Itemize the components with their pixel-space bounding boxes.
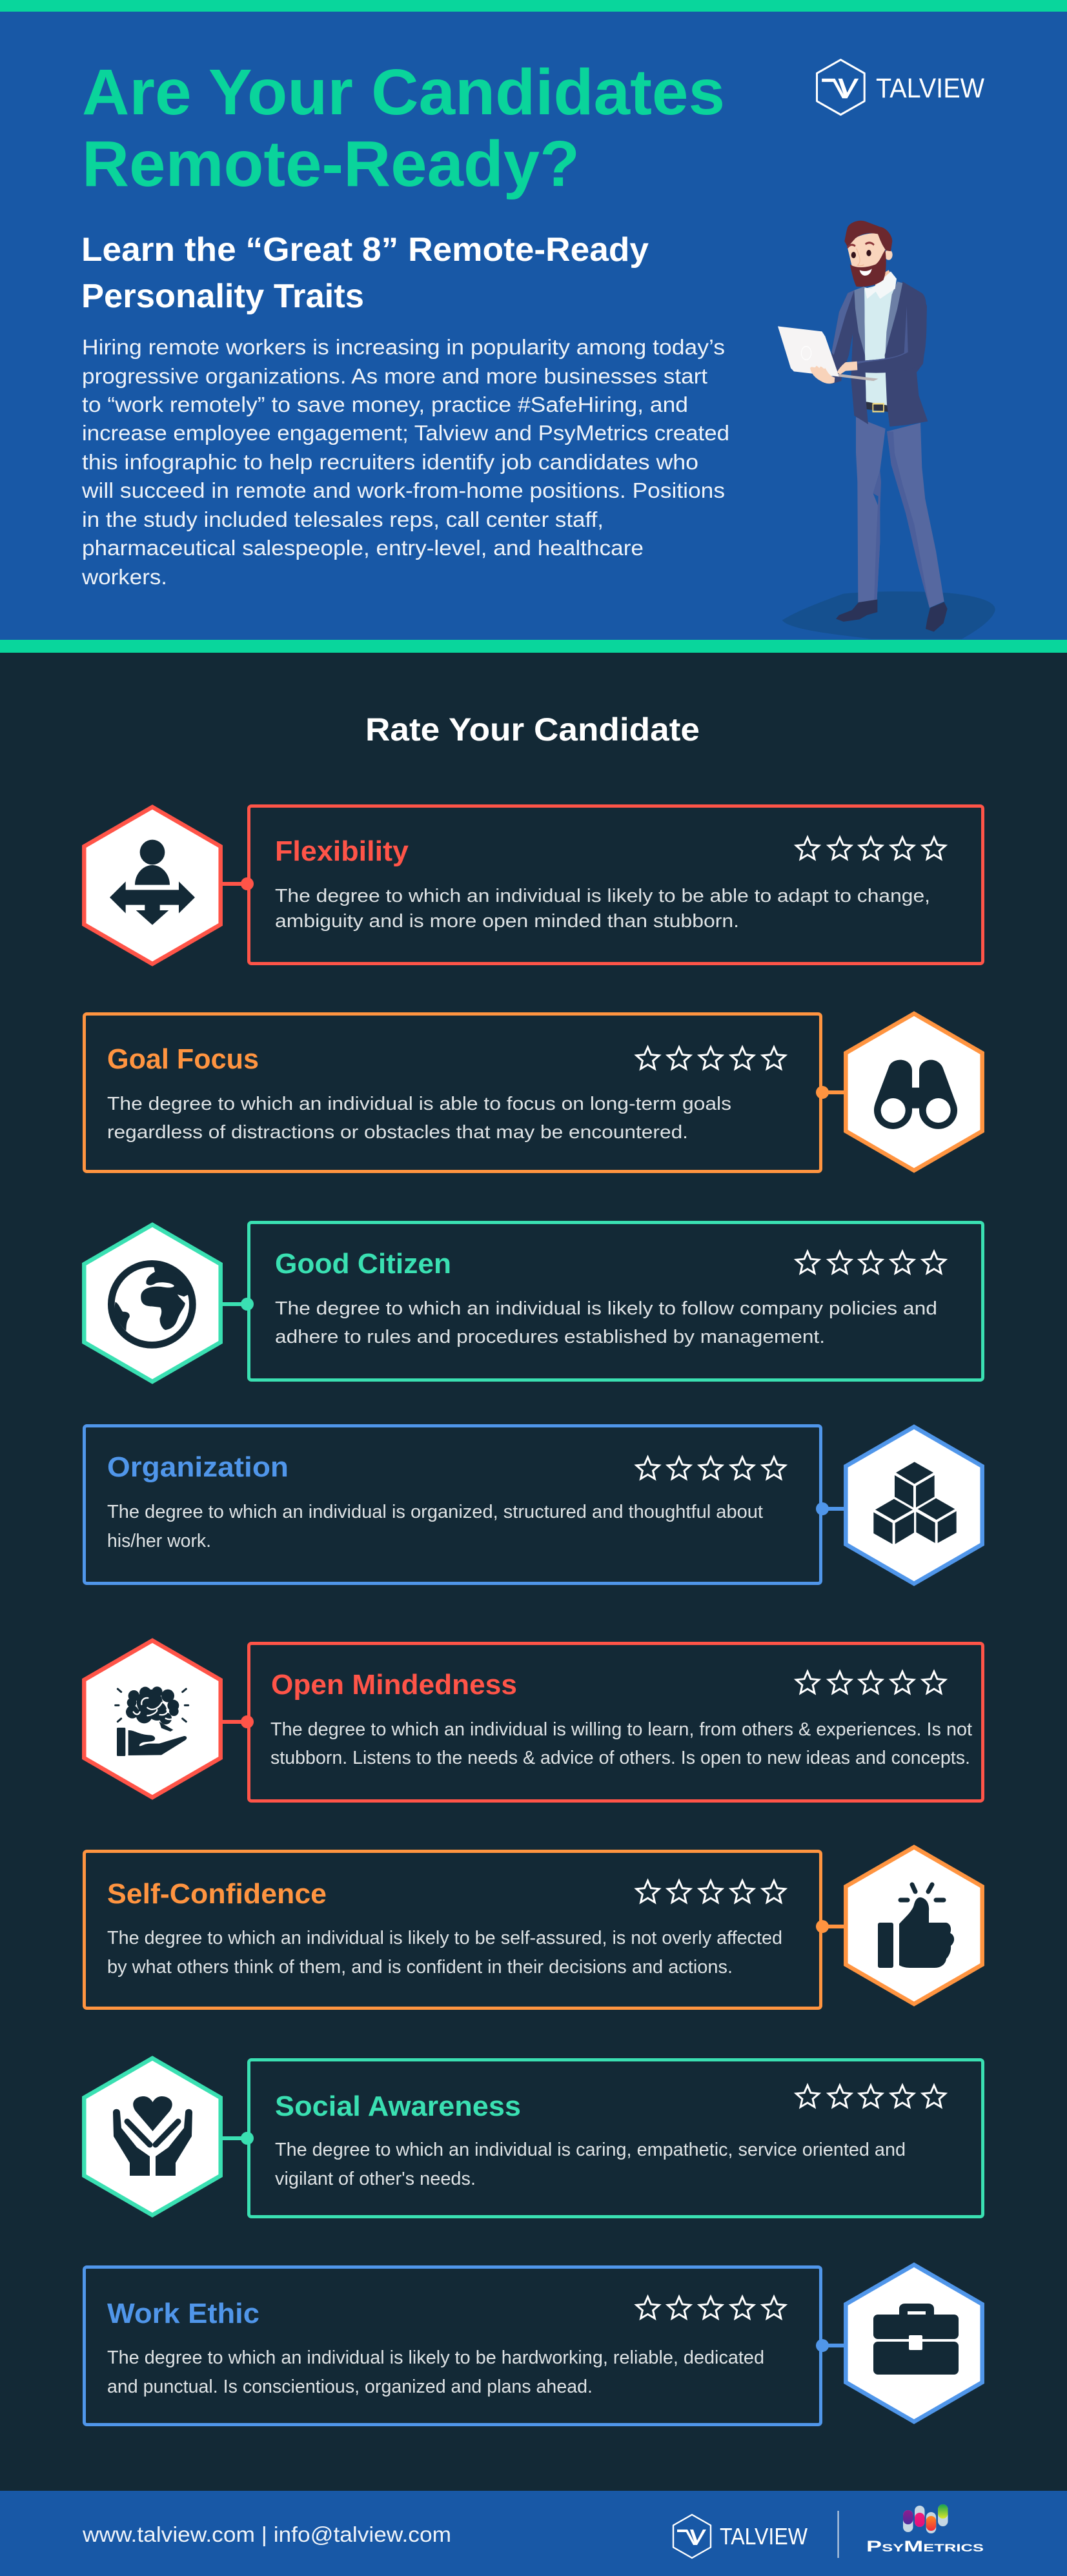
- panel: Organization: [84, 1426, 982, 1584]
- intro text block: workers.: [81, 565, 167, 589]
- footer contact text: www.talview.com | info@talview.com: [82, 2522, 451, 2546]
- star rating: [796, 837, 946, 859]
- icon hexagon: Flexibility: [84, 807, 221, 964]
- description: Flexibility: The degree to which an individual is likely to be able to adapt to change,: [275, 886, 930, 906]
- description: Flexibility: ambiguity and is more open minded than stubborn.: [275, 911, 739, 932]
- card: Goal Focus: [84, 1014, 821, 1171]
- description: Open Mindedness: [270, 1719, 972, 1768]
- description: Work Ethic: The degree to which an individual is likely to be hardworking, reliable, dedicated: [107, 2347, 764, 2368]
- star rating: [796, 2085, 946, 2107]
- logo: PsyMetrics: P SY M ETRICS: [866, 2538, 984, 2555]
- description: Good Citizen: adhere to rules and procedures established by management.: [275, 1327, 825, 1347]
- illustration: man with laptop: [778, 221, 995, 639]
- card: Good Citizen: [249, 1223, 982, 1380]
- intro text block: this infographic to help recruiters identify job candidates who: [82, 450, 698, 474]
- heading: Open Mindedness: Open Mindedness: [271, 1669, 517, 1701]
- description: Self-Confidence: by what others think of them, and is confident in their decisions and actions.: [107, 1957, 733, 1978]
- icon hexagon: Open Mindedness: [84, 1641, 221, 1797]
- connector: Flexibility: [219, 877, 254, 890]
- description: Open Mindedness: The degree to which an individual is willing to learn, from others & experiences. Is not: [270, 1719, 972, 1740]
- panel: Good Citizen: [84, 1223, 982, 1382]
- title: Remote-Ready?: [82, 128, 580, 200]
- connector: Social Awareness: [219, 2132, 254, 2145]
- connector: Self-Confidence: [816, 1920, 848, 1933]
- description: Organization: his/her work.: [107, 1531, 211, 1551]
- description: Flexibility: [275, 886, 930, 932]
- icon hexagon: Good Citizen: [84, 1225, 221, 1382]
- card: Self-Confidence: [84, 1852, 821, 2008]
- description: Social Awareness: vigilant of other's needs.: [275, 2169, 476, 2189]
- description: Work Ethic: [107, 2347, 764, 2397]
- star rating: [796, 1671, 946, 1693]
- description: Social Awareness: The degree to which an individual is caring, empathetic, service oriented and: [275, 2140, 906, 2160]
- logo: PsyMetrics: [866, 2504, 984, 2555]
- heading: Work Ethic: Work Ethic: [107, 2298, 259, 2329]
- connector: Goal Focus: [816, 1086, 848, 1099]
- description: Good Citizen: The degree to which an individual is likely to follow company policies and: [275, 1298, 937, 1319]
- connector: Open Mindedness: [219, 1715, 254, 1728]
- star rating: [636, 1881, 786, 1902]
- icon: hands holding heart: [113, 2096, 192, 2176]
- intro text block: in the study included telesales reps, call center staff,: [82, 507, 604, 531]
- icon: binoculars: [874, 1060, 957, 1129]
- card: Open Mindedness: [249, 1644, 982, 1801]
- intro text block: increase employee engagement; Talview and PsyMetrics created: [82, 421, 729, 445]
- subtitle: Learn the “Great 8” Remote-Ready: [81, 231, 649, 269]
- connector: Good Citizen: [219, 1298, 254, 1311]
- heading: Flexibility: Flexibility: [275, 835, 409, 867]
- intro text block: pharmaceutical salespeople, entry-level, and healthcare: [82, 536, 644, 560]
- heading: Goal Focus: Goal Focus: [107, 1043, 259, 1075]
- description: Organization: The degree to which an individual is organized, structured and thoughtful about: [107, 1502, 763, 1522]
- intro text block: progressive organizations. As more and more businesses start: [82, 364, 707, 388]
- intro text block: to “work remotely” to save money, practice #SafeHiring, and: [82, 393, 688, 416]
- panel: Flexibility: [84, 806, 982, 964]
- card: Work Ethic: [84, 2267, 821, 2425]
- divider: [838, 2511, 839, 2558]
- description: Organization: [107, 1502, 763, 1551]
- panel: Work Ethic: [84, 2265, 982, 2425]
- heading: Self-Confidence: Self-Confidence: [107, 1878, 327, 1910]
- star rating: [636, 1047, 786, 1069]
- heading: Rate Your Candidate: Rate Your Candidate: [365, 711, 700, 748]
- logo: Talview header: TALVIEW: [876, 73, 984, 104]
- header panel: [0, 0, 1067, 653]
- card: Organization: [84, 1426, 821, 1583]
- panel: Social Awareness: [84, 2058, 982, 2217]
- panel: Goal Focus: [84, 1014, 982, 1171]
- description: Good Citizen: [275, 1298, 937, 1347]
- card: Flexibility: [249, 806, 982, 963]
- icon hexagon: Goal Focus: [846, 1014, 982, 1170]
- star rating: [636, 1457, 786, 1478]
- description: Goal Focus: [107, 1094, 731, 1143]
- icon hexagon: Self-Confidence: [846, 1847, 982, 2004]
- icon: cubes: [873, 1462, 957, 1544]
- connector: Organization: [816, 1502, 848, 1515]
- subtitle: Personality Traits: [81, 278, 364, 315]
- description: Social Awareness: [275, 2140, 906, 2189]
- intro text block: [81, 335, 729, 589]
- panel: Open Mindedness: [84, 1641, 982, 1801]
- title: Are Your Candidates: [82, 56, 725, 128]
- logo: Talview footer: [673, 2515, 808, 2558]
- heading: Good Citizen: Good Citizen: [275, 1248, 451, 1280]
- icon hexagon: Work Ethic: [846, 2265, 982, 2422]
- description: Goal Focus: The degree to which an individual is able to focus on long-term goals: [107, 1094, 731, 1114]
- icon: briefcase: [873, 2304, 959, 2375]
- icon: person with arrows: [110, 840, 195, 925]
- footer panel: [0, 2491, 1067, 2576]
- logo: Talview header: [817, 60, 984, 115]
- description: Goal Focus: regardless of distractions or obstacles that may be encountered.: [107, 1122, 688, 1143]
- description: Open Mindedness: stubborn. Listens to the needs & advice of others. Is open to new ideas and concepts.: [270, 1748, 970, 1768]
- description: Work Ethic: and punctual. Is conscientious, organized and plans ahead.: [107, 2377, 593, 2397]
- heading: Social Awareness: Social Awareness: [275, 2090, 521, 2122]
- star rating: [636, 2297, 786, 2318]
- subtitle: [81, 231, 649, 315]
- icon hexagon: Organization: [846, 1427, 982, 1584]
- description: Self-Confidence: [107, 1928, 782, 1978]
- card: Social Awareness: [249, 2060, 982, 2217]
- intro text block: will succeed in remote and work-from-home positions. Positions: [81, 478, 725, 502]
- icon: globe: [108, 1260, 196, 1349]
- logo: Talview footer: TALVIEW: [720, 2523, 808, 2550]
- connector: Work Ethic: [816, 2339, 848, 2352]
- icon: brain over hand: [116, 1686, 188, 1756]
- panel: Self-Confidence: [84, 1847, 982, 2008]
- intro text block: Hiring remote workers is increasing in popularity among today’s: [82, 335, 725, 359]
- title: [82, 56, 725, 200]
- description: Self-Confidence: The degree to which an individual is likely to be self-assured, is not overly affected: [107, 1928, 782, 1948]
- icon hexagon: Social Awareness: [84, 2058, 221, 2215]
- heading: Organization: Organization: [107, 1451, 289, 1483]
- star rating: [796, 1251, 946, 1273]
- icon: thumbs up: [878, 1885, 954, 1968]
